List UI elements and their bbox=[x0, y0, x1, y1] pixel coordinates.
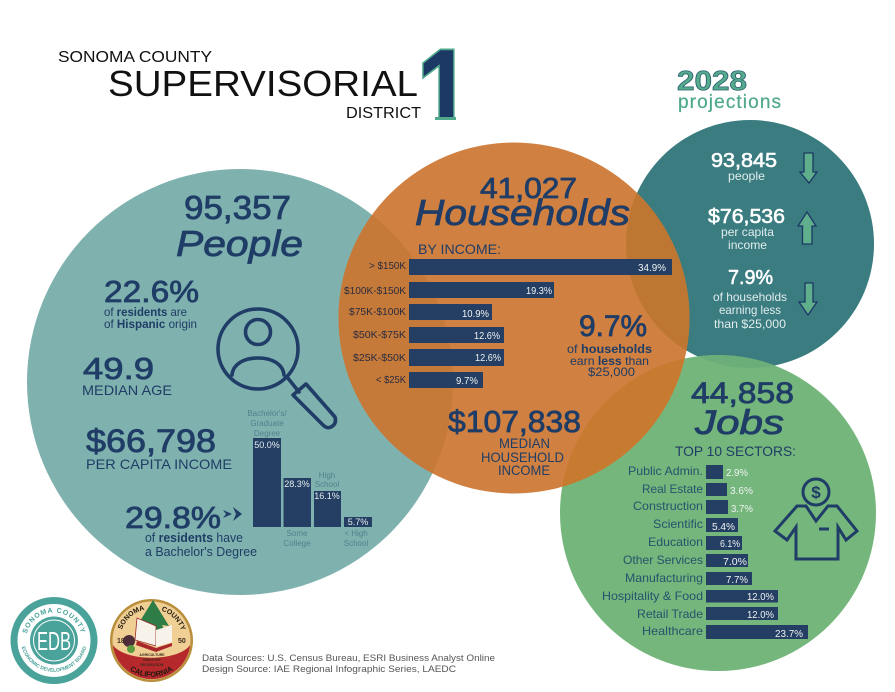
title: DISTRICT bbox=[346, 105, 422, 122]
median household income: HOUSEHOLD bbox=[481, 449, 564, 465]
projected people: people bbox=[728, 169, 765, 183]
bar chart: top sectors: 2.9% bbox=[726, 467, 748, 479]
bar chart: top sectors: Real Estate bbox=[642, 482, 703, 496]
bachelor's degree share: of residents have bbox=[145, 531, 243, 545]
logo: county seal: RECREATION bbox=[141, 663, 164, 667]
bar chart: households by income: $75K-$100K bbox=[349, 306, 406, 318]
bar chart: top sectors: Education bbox=[648, 535, 703, 549]
bar chart: top sectors: 3.6% bbox=[730, 485, 753, 497]
median household income: INCOME bbox=[498, 462, 550, 478]
median age: 49.9 bbox=[83, 351, 154, 386]
bar chart: educational attainment: Bachelor's/ bbox=[247, 409, 287, 418]
data sources: Data Sources: U.S. Census Bureau, ESRI Business Analyst Online bbox=[202, 653, 495, 664]
households count: Households bbox=[415, 192, 630, 233]
bar chart: top sectors: Construction bbox=[633, 499, 703, 513]
hispanic share: 22.6% bbox=[104, 274, 199, 309]
projected income bbox=[708, 206, 785, 252]
projected income: income bbox=[728, 238, 767, 252]
arrow: up bbox=[798, 212, 816, 244]
bar chart: educational attainment: < High bbox=[344, 529, 368, 538]
data sources bbox=[202, 653, 495, 675]
bar chart: households by income: $100K-$150K bbox=[344, 285, 406, 297]
bachelor's degree share: a Bachelor's Degree bbox=[145, 545, 257, 559]
bar chart: educational attainment: Degree bbox=[254, 429, 281, 438]
bar chart: educational attainment: 50.0% bbox=[254, 440, 280, 450]
district number 1 bbox=[422, 48, 456, 120]
jobs count: 44,858 bbox=[691, 377, 794, 410]
bar chart: households by income: < $25K bbox=[376, 374, 406, 386]
bar chart: educational attainment: Some bbox=[287, 529, 308, 538]
households count: BY INCOME: bbox=[418, 241, 501, 257]
bar chart: households by income: 12.6% bbox=[474, 330, 500, 342]
bar chart: top sectors: Public Admin. bbox=[628, 464, 703, 478]
low income share callout: of households bbox=[567, 342, 652, 356]
bar chart: top sectors: 6.1% bbox=[720, 538, 740, 550]
hispanic share bbox=[104, 274, 199, 331]
median household income: $107,838 bbox=[448, 404, 581, 439]
median household income: MEDIAN bbox=[499, 435, 550, 451]
bar chart: top sectors: Healthcare bbox=[642, 624, 703, 638]
hispanic share: of residents are bbox=[104, 305, 187, 319]
logo: economic development board: ECONOMIC DEVELOPMENT BOARD bbox=[22, 646, 86, 672]
panel: households bbox=[338, 142, 690, 494]
per capita income: PER CAPITA INCOME bbox=[86, 456, 232, 472]
data sources: Design Source: IAE Regional Infographic Series, LAEDC bbox=[202, 664, 456, 675]
panel: jobs bbox=[560, 355, 876, 671]
hispanic share: of Hispanic origin bbox=[104, 317, 197, 331]
bachelor's degree share: 29.8% bbox=[125, 500, 221, 535]
projected people bbox=[711, 150, 777, 183]
jobs count bbox=[675, 377, 796, 459]
projections heading: 2028 bbox=[677, 65, 747, 96]
bar chart: educational attainment bbox=[247, 409, 372, 548]
title bbox=[58, 49, 422, 122]
bar chart: households by income: 34.9% bbox=[638, 262, 666, 274]
projected income: $76,536 bbox=[708, 206, 785, 228]
bar chart: educational attainment: Graduate bbox=[250, 419, 284, 428]
logo: economic development board bbox=[10, 597, 98, 684]
bar chart: households by income: $50K-$75K bbox=[353, 329, 406, 341]
district number 1: 1 bbox=[417, 25, 471, 158]
logo: county seal: 50 bbox=[178, 638, 186, 645]
jobs count: Jobs bbox=[694, 404, 784, 442]
bar chart: top sectors: 5.4% bbox=[712, 521, 735, 533]
bar chart: top sectors: Scientific bbox=[653, 517, 703, 531]
bar chart: top sectors: 3.7% bbox=[731, 503, 753, 515]
per capita income: $66,798 bbox=[86, 423, 216, 459]
projected people: 93,845 bbox=[711, 150, 777, 172]
households count bbox=[415, 173, 630, 257]
title: SONOMA COUNTY bbox=[58, 49, 212, 66]
median household income bbox=[448, 404, 581, 478]
projected low income share: of households bbox=[713, 290, 787, 304]
low income share callout: 9.7% bbox=[579, 310, 647, 343]
icon: chevrons bbox=[223, 507, 242, 521]
projected income: per capita bbox=[721, 225, 774, 239]
bar chart: top sectors: 12.0% bbox=[747, 609, 774, 621]
bar chart: educational attainment: School bbox=[315, 480, 339, 489]
low income share callout: earn less than bbox=[570, 354, 649, 368]
projections heading bbox=[677, 65, 781, 113]
bar chart: households by income: 12.6% bbox=[475, 352, 501, 364]
jobs count: TOP 10 SECTORS: bbox=[675, 443, 796, 459]
logo: economic development board: EDB bbox=[37, 626, 71, 656]
projected low income share bbox=[713, 267, 787, 331]
bar chart: educational attainment: High bbox=[319, 471, 335, 480]
low income share callout: $25,000 bbox=[588, 365, 635, 379]
projections heading: projections bbox=[678, 92, 781, 113]
arrow: down bbox=[800, 153, 817, 183]
projected low income share: than $25,000 bbox=[714, 317, 786, 331]
bar chart: top sectors: Hospitality & Food bbox=[602, 589, 703, 603]
logo: county seal: COUNTY bbox=[162, 606, 186, 629]
bar chart: top sectors bbox=[602, 464, 808, 640]
bar chart: educational attainment: 16.1% bbox=[314, 491, 340, 501]
bar chart: top sectors: 7.7% bbox=[726, 574, 748, 586]
panel: people bbox=[27, 169, 453, 595]
logo: county seal: CALIFORNIA bbox=[130, 666, 173, 677]
bar chart: educational attainment: School bbox=[344, 539, 368, 548]
bar chart: top sectors: Manufacturing bbox=[625, 571, 703, 585]
icon: worker with dollar bbox=[775, 479, 857, 559]
bar chart: households by income: > $150K bbox=[369, 260, 406, 272]
bar chart: households by income bbox=[344, 259, 672, 388]
logo: county seal: SONOMA bbox=[118, 606, 144, 630]
title: SUPERVISORIAL bbox=[108, 63, 418, 104]
people count: 95,357 bbox=[184, 189, 291, 226]
people count bbox=[176, 189, 303, 264]
arrow: down bbox=[799, 283, 817, 315]
bachelor's degree share bbox=[125, 500, 257, 559]
bar chart: households by income: 10.9% bbox=[462, 308, 489, 320]
logo: county seal bbox=[110, 599, 193, 682]
icon: magnifier with person bbox=[218, 309, 336, 428]
bar chart: households by income: 19.3% bbox=[526, 285, 552, 297]
bar chart: households by income: 9.7% bbox=[456, 375, 478, 387]
bar chart: educational attainment: College bbox=[283, 539, 311, 548]
bar chart: educational attainment: 28.3% bbox=[284, 479, 310, 489]
logo: county seal: INDUSTRY bbox=[143, 658, 162, 662]
households count: 41,027 bbox=[480, 173, 577, 205]
bar chart: top sectors: Retail Trade bbox=[637, 607, 703, 621]
bar chart: educational attainment: 5.7% bbox=[348, 517, 368, 527]
logo: economic development board: SONOMA COUNTY bbox=[22, 608, 86, 634]
logo: county seal: AGRICULTURE bbox=[139, 653, 165, 657]
bar chart: top sectors: 23.7% bbox=[775, 628, 803, 640]
low income share callout bbox=[567, 310, 652, 379]
median age bbox=[82, 351, 172, 398]
bar chart: top sectors: 12.0% bbox=[747, 591, 774, 603]
people count: People bbox=[176, 223, 303, 264]
logo: county seal: 18 bbox=[117, 638, 125, 645]
bar chart: top sectors: Other Services bbox=[623, 553, 703, 567]
projected low income share: 7.9% bbox=[728, 267, 773, 289]
panel: 2028 projections bbox=[626, 65, 874, 368]
projected low income share: earning less bbox=[719, 303, 781, 317]
median age: MEDIAN AGE bbox=[82, 382, 172, 398]
bar chart: top sectors: 7.0% bbox=[723, 556, 747, 568]
bar chart: households by income: $25K-$50K bbox=[353, 352, 406, 364]
per capita income bbox=[86, 423, 232, 472]
icon: worker with dollar: $ bbox=[811, 483, 821, 502]
